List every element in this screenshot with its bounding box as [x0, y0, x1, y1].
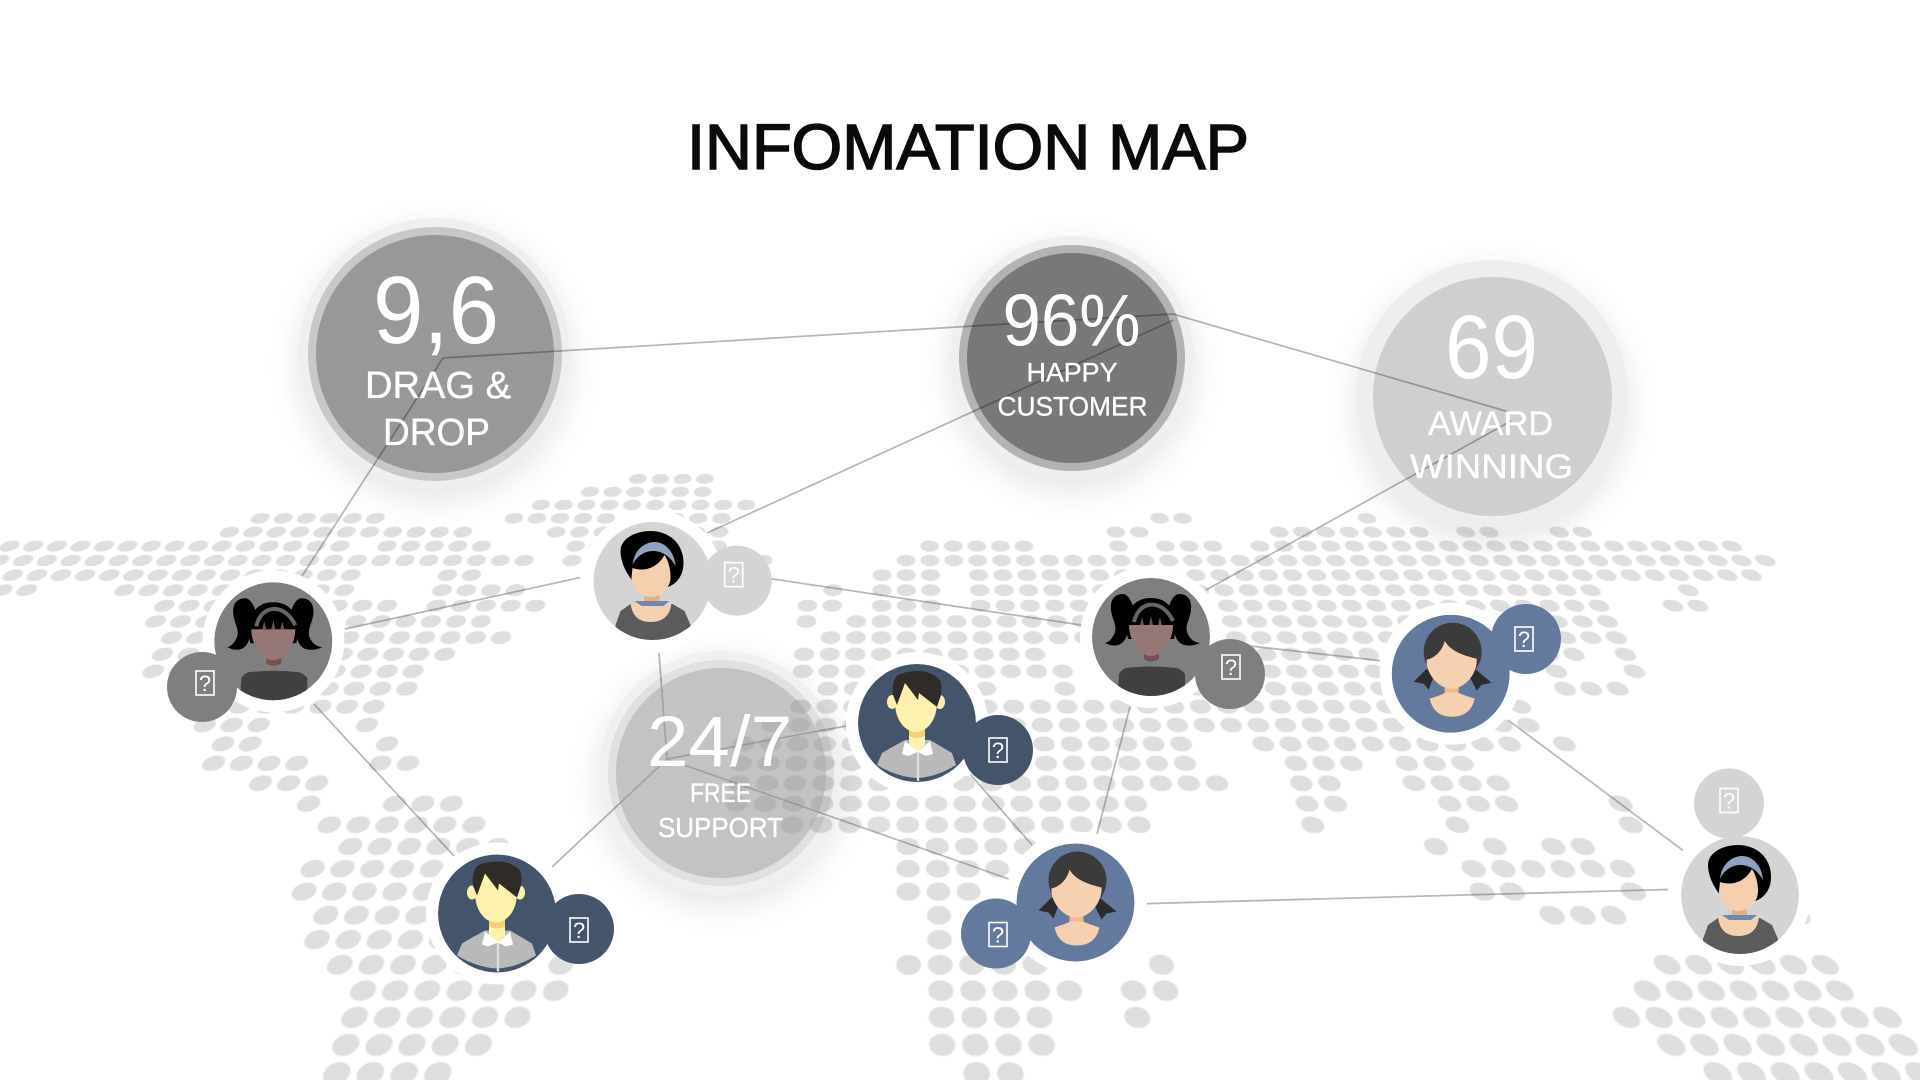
stat circle: 24/7 free support: 24/7: [647, 703, 792, 782]
stat circle: 69 award winning: WINNING: [1410, 448, 1573, 486]
badge: [544, 894, 614, 964]
badge: [167, 652, 237, 722]
badge: [702, 546, 772, 616]
avatar: girl with headband, far right: [1669, 768, 1811, 966]
people network: [167, 510, 1808, 984]
stat circle: 96% happy customer: [943, 236, 1201, 497]
avatar: man, bottom left: [426, 842, 614, 984]
stat circle: 9,6 drag and drop: 9,6: [373, 257, 499, 364]
badge: [1694, 768, 1764, 838]
stat circle: 24/7 free support: SUPPORT: [658, 812, 783, 843]
title: INFOMATION MAP: [687, 111, 1249, 182]
badge: [1195, 639, 1265, 709]
stat circle: 96% happy customer: HAPPY: [1026, 357, 1117, 387]
stat circle: 9,6 drag and drop: DRAG &: [365, 365, 511, 407]
stat circle: 24/7 free support: [592, 651, 850, 912]
badge: [961, 898, 1031, 968]
stat circle: 24/7 free support: FREE: [690, 778, 751, 808]
stat circle: 96% happy customer: CUSTOMER: [997, 391, 1147, 421]
stat circle: 69 award winning: AWARD: [1428, 405, 1553, 443]
stat circle: 96% happy customer: 96%: [1002, 280, 1140, 361]
stat circle: 9,6 drag and drop: [292, 218, 577, 506]
avatar: girl with pigtails, right centre: [1080, 566, 1265, 709]
badge: [963, 715, 1033, 785]
stat circle: 69 award winning: 69: [1445, 298, 1538, 398]
badge: [1491, 604, 1561, 674]
avatar: girl with headband, top centre: [582, 510, 772, 652]
avatar: blue girl, right: [1380, 603, 1561, 745]
avatar: blue girl, bottom centre: [961, 832, 1146, 974]
avatar: girl with pigtails, left: [167, 570, 344, 722]
avatar: man, centre: [846, 652, 1033, 794]
stat circle: 69 award winning: [1349, 260, 1635, 549]
stat circle: 9,6 drag and drop: DROP: [383, 412, 490, 454]
